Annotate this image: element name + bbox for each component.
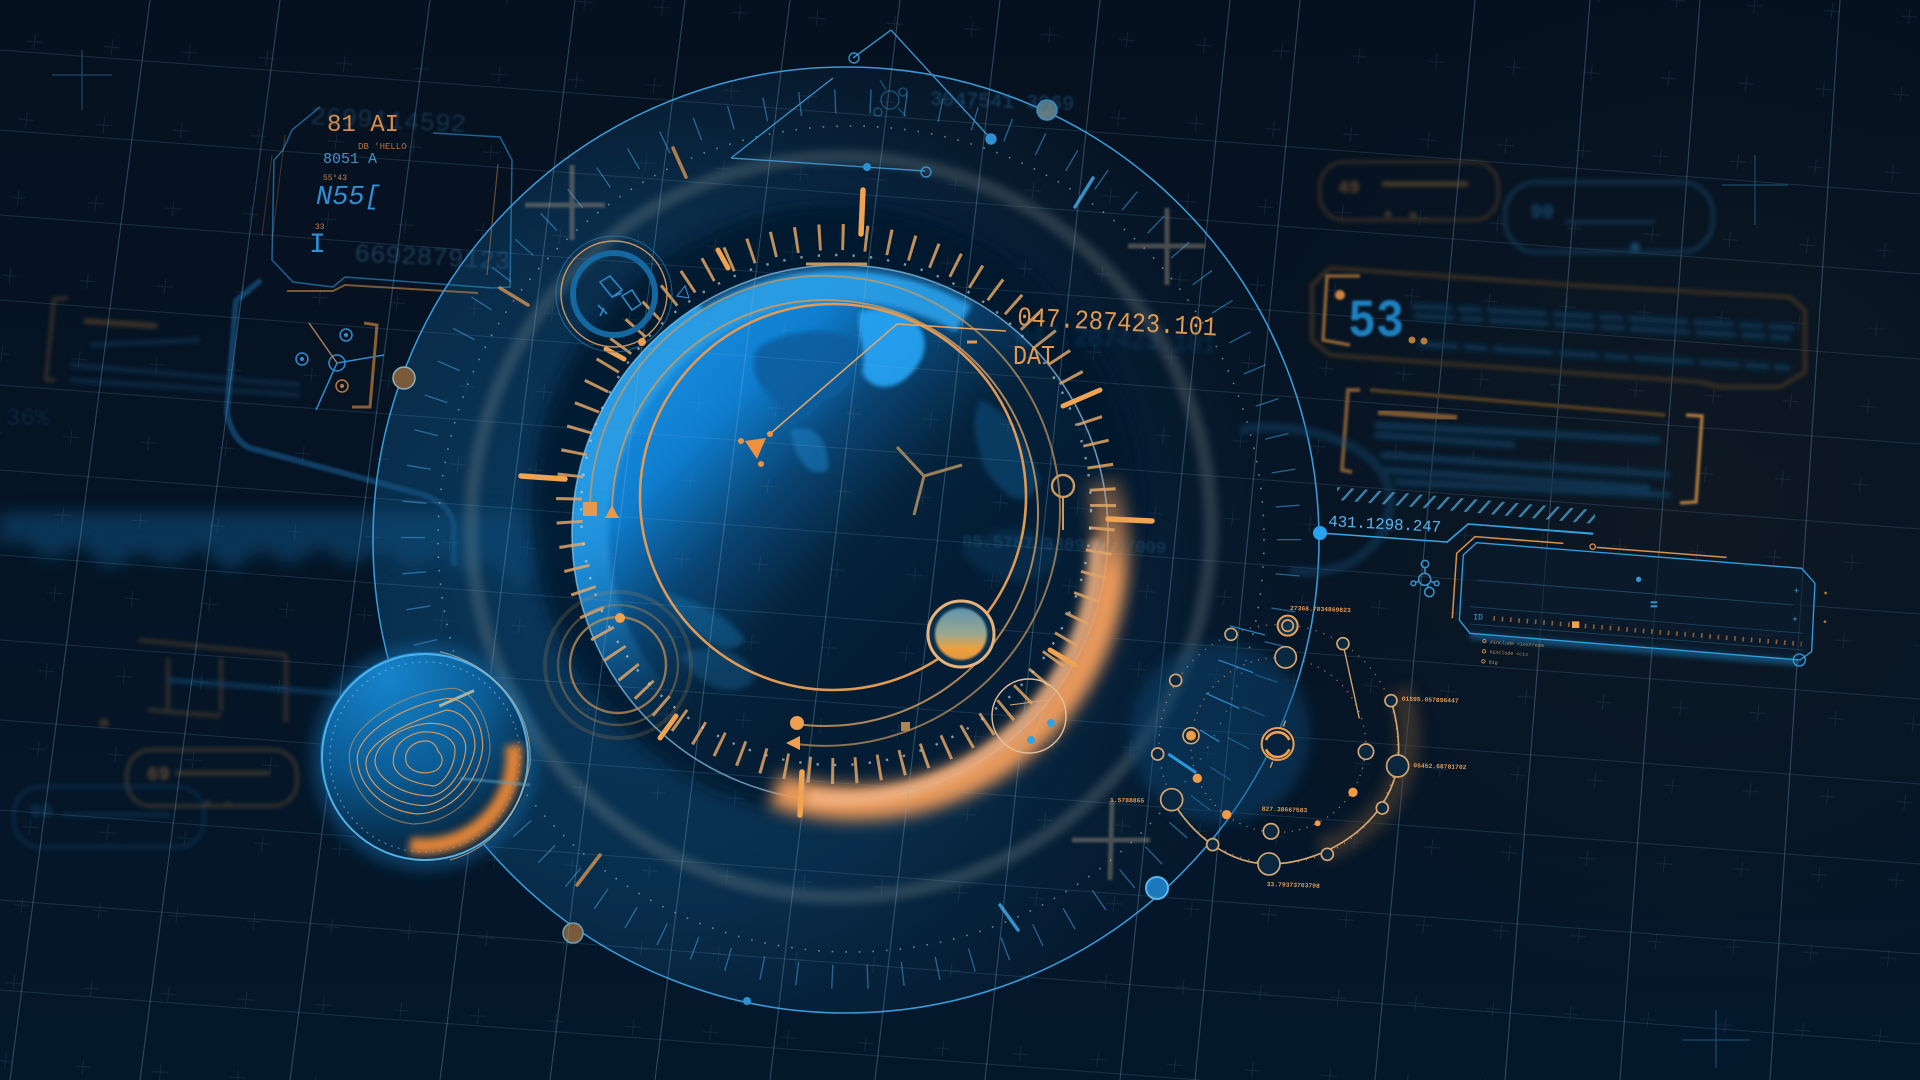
readout 431.1298.247: 431.1298.247 — [1328, 513, 1442, 537]
node labels: 827.38667583 — [1262, 806, 1308, 814]
pill 49: 49 — [1338, 179, 1360, 199]
pill 90 right: 90 — [1530, 202, 1554, 225]
node labels: 01595.057896447 — [1402, 696, 1459, 705]
orbit dot and arrow — [786, 716, 910, 750]
lower-right hatched panel — [1447, 524, 1827, 666]
label 8051 A: 8051 A — [323, 151, 377, 168]
top gear icon and dim digits — [874, 80, 1075, 117]
include text: Big — [1489, 660, 1498, 666]
small dash — [967, 340, 977, 344]
globe — [572, 265, 1112, 803]
left blurred orange bracket panel — [46, 298, 300, 395]
panel glow — [1470, 635, 1800, 662]
lower-left dim chart — [99, 640, 368, 728]
peach rim highlight — [810, 540, 1096, 799]
left connector rounded path — [227, 280, 454, 566]
dial lower right — [992, 679, 1066, 753]
panel 53 — [1312, 268, 1805, 387]
dotted rings — [1159, 625, 1398, 863]
orange rim glow — [775, 480, 1112, 803]
orbit arcs — [612, 300, 1038, 726]
label N55: N55[ — [316, 183, 381, 213]
top ring node — [1278, 616, 1298, 636]
ball on orbit — [928, 601, 994, 667]
readout 047.287423.101: 047.287423.101 — [1016, 321, 1217, 361]
satellite icon — [598, 276, 641, 316]
blue top line — [1447, 524, 1593, 543]
bright rim — [572, 265, 1108, 801]
orbital node chart — [1110, 605, 1467, 890]
include text — [1482, 639, 1544, 666]
left square and triangle — [583, 502, 597, 516]
panel outline — [1459, 543, 1815, 660]
central node — [1262, 728, 1294, 760]
large outer circle — [373, 67, 1319, 1013]
readout DAT: DAT — [1013, 343, 1055, 373]
upper-left data panel — [262, 102, 512, 293]
dotted orbit — [438, 126, 1264, 952]
land masses — [588, 266, 1060, 695]
include text: #include <iostream — [1490, 639, 1544, 649]
orange crescent — [410, 745, 514, 846]
normal ticks — [569, 237, 1103, 771]
readout 047.287423.101 — [1016, 304, 1218, 361]
tick ring — [521, 190, 1152, 815]
label 81 AI: 81 AI — [327, 112, 399, 139]
dark backing behind tick ring — [531, 205, 1141, 815]
radar dial with satellite — [556, 236, 689, 352]
label 55 43: 55°43 — [323, 174, 347, 183]
label DB HELLO: DB 'HELLO — [358, 142, 407, 152]
node labels: 05452.68781702 — [1413, 762, 1467, 771]
outer ring system — [373, 30, 1319, 1013]
y-shaped marker — [897, 447, 962, 515]
dim number top: 2699114592 — [310, 102, 467, 140]
blue connector dot — [1313, 524, 1593, 542]
orange corner lines — [1452, 537, 1727, 618]
dark round arcs behind — [1240, 428, 1390, 572]
orange pill 69 — [127, 750, 297, 806]
globe sphere — [572, 265, 1108, 801]
panel 53: 53 — [1348, 292, 1404, 353]
cross marks — [525, 165, 1205, 880]
node labels: 33.79373703798 — [1267, 881, 1320, 890]
left dim text 36%: 36% — [6, 406, 50, 433]
pill 49 — [1320, 162, 1498, 220]
hatch bar — [1337, 487, 1595, 524]
orange dots — [1183, 728, 1358, 826]
contour disc — [313, 645, 537, 869]
blue pill 90 — [14, 787, 204, 847]
small radar gadget left — [296, 323, 384, 410]
top gear icon and dim digits: 3047541 3969 — [930, 89, 1075, 117]
label 33: 33 — [315, 223, 325, 232]
haze ring — [471, 157, 1211, 897]
central blue halo — [374, 68, 1318, 1012]
orange dial lower left — [545, 592, 691, 738]
dim number bottom: 6692879123 — [354, 239, 511, 277]
major ticks — [521, 190, 1152, 815]
orange triangle target — [745, 438, 766, 459]
blue pill 90: 90 — [30, 801, 53, 823]
contour lines — [349, 652, 530, 860]
sparse outer ticks — [413, 101, 1289, 977]
globe markers — [583, 264, 1006, 518]
label I: I — [309, 230, 326, 261]
node labels: 1.5788865 — [1110, 797, 1144, 805]
small ring on orbit — [1052, 475, 1074, 530]
readout 047.287423.101: 047.287423.101 — [1017, 304, 1218, 344]
hatched progress — [1493, 618, 1802, 644]
label ID: ID — [1473, 613, 1483, 622]
panel marks — [1636, 577, 1657, 607]
include text: #include <ctx — [1489, 649, 1528, 658]
waveform band left — [0, 512, 600, 590]
node labels — [1110, 605, 1467, 890]
blurred right panels — [1240, 162, 1805, 572]
upper rim band — [588, 281, 966, 695]
solid arc — [1172, 701, 1399, 864]
dotted inner ring — [581, 255, 1091, 765]
dim readout over globe: 85.5787 3389 ////009 — [962, 533, 1166, 559]
accent bars — [500, 148, 1093, 930]
ring node circles — [393, 100, 1168, 1005]
orange pill 69: 69 — [147, 764, 170, 786]
main orange circle — [640, 304, 1026, 690]
blue bars — [1168, 754, 1196, 773]
molecule icon — [1411, 560, 1439, 597]
top tan bar — [806, 262, 867, 266]
pointer line — [771, 324, 1006, 433]
bracket text panel — [1342, 390, 1702, 503]
triangle marker — [731, 30, 996, 177]
node labels: 27368.7834869823 — [1290, 605, 1351, 614]
chart nodes — [1152, 628, 1409, 875]
orange orbits — [545, 276, 1074, 753]
pill 90 right — [1505, 182, 1713, 252]
dark top rim — [700, 266, 1030, 345]
